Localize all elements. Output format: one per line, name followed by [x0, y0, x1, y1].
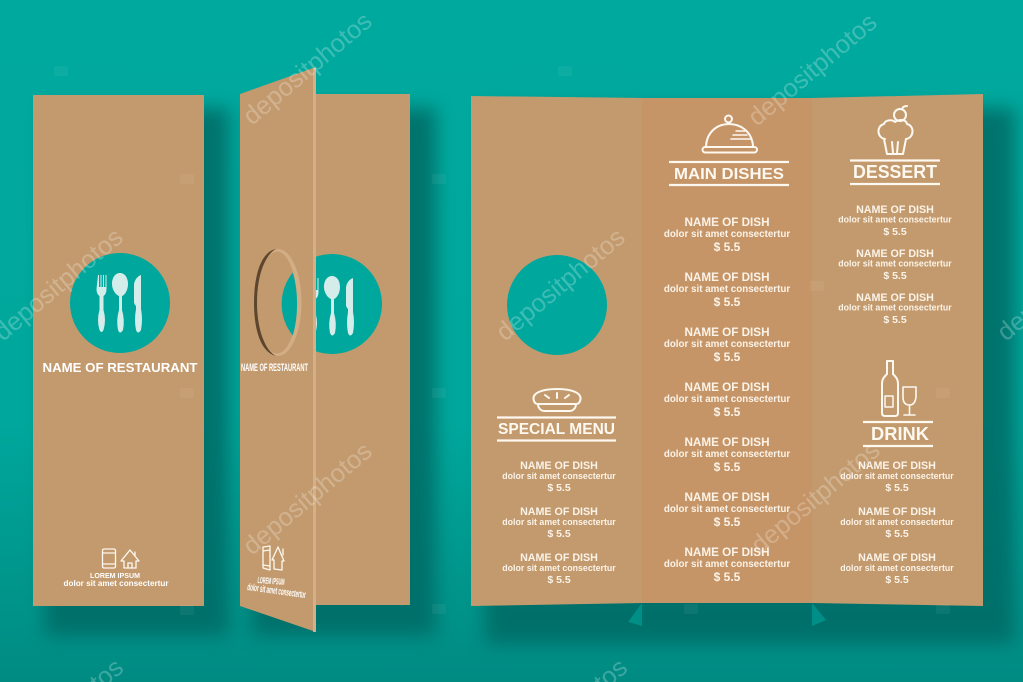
dish: $ 5.5 [714, 515, 741, 529]
watermarks: depositphotos [746, 436, 886, 560]
dish [664, 326, 790, 364]
watermarks: depositphotos [491, 223, 631, 347]
dish: NAME OF DISH [684, 216, 770, 229]
dish: dolor sit amet consectertur [502, 471, 616, 481]
flap fold highlight [313, 68, 316, 632]
dish: NAME OF DISH [520, 460, 598, 472]
teal circle [507, 255, 607, 355]
dish: dolor sit amet consectertur [840, 517, 954, 527]
dish: $ 5.5 [714, 295, 741, 309]
dish: NAME OF DISH [520, 552, 598, 564]
dish: NAME OF DISH [684, 271, 770, 284]
dish: $ 5.5 [714, 570, 741, 584]
middle page [642, 98, 812, 603]
icon: house on flap [272, 547, 284, 570]
dish [664, 216, 790, 254]
dish [840, 460, 954, 494]
watermarks: depositphotos [238, 7, 378, 131]
dish: NAME OF DISH [858, 506, 936, 518]
dish [502, 460, 616, 494]
dish: dolor sit amet consectertur [840, 563, 954, 573]
heading rules [669, 162, 789, 185]
restaurant name: NAME OF RESTAURANT [42, 360, 198, 375]
dish: dolor sit amet consectertur [502, 517, 616, 527]
cover sheet [33, 95, 204, 606]
right page [812, 94, 983, 606]
dish: NAME OF DISH [520, 506, 598, 518]
dish [664, 546, 790, 584]
contact text: LOREM IPSUM [90, 571, 140, 580]
dish: dolor sit amet consectertur [838, 302, 952, 312]
icon: tablet [102, 549, 116, 568]
dish: dolor sit amet consectertur [502, 563, 616, 573]
section: drink [840, 361, 954, 586]
panel: half-open menu: dolor sit amet consectertur [247, 582, 307, 601]
back page [316, 94, 410, 605]
dish: $ 5.5 [883, 270, 907, 282]
dish: dolor sit amet consectertur [838, 258, 952, 268]
dish: dolor sit amet consectertur [664, 504, 790, 515]
dish: dolor sit amet consectertur [664, 339, 790, 350]
dish: $ 5.5 [883, 226, 907, 238]
heading: DRINK [871, 424, 929, 444]
panel: half-open menu [240, 67, 410, 632]
shadows [45, 108, 1015, 644]
dish [840, 506, 954, 540]
heading rules [863, 422, 933, 446]
dish [502, 506, 616, 540]
contact details: dolor sit amet consectertur [64, 579, 168, 588]
dish: $ 5.5 [714, 405, 741, 419]
dish: dolor sit amet consectertur [838, 214, 952, 224]
heading rules [497, 418, 616, 440]
dish [664, 436, 790, 474]
dish: dolor sit amet consectertur [664, 284, 790, 295]
dish: NAME OF DISH [684, 326, 770, 339]
heading: SPECIAL MENU [498, 421, 615, 438]
flap restaurant name: NAME OF RESTAURANT [241, 362, 308, 374]
dish: $ 5.5 [547, 574, 571, 586]
watermark camera icons [54, 66, 950, 615]
dish [664, 271, 790, 309]
dish: dolor sit amet consectertur [664, 229, 790, 240]
icon: cupcake [878, 106, 913, 154]
dish: $ 5.5 [885, 482, 909, 494]
icon: cloche [702, 116, 757, 152]
dish: dolor sit amet consectertur [664, 559, 790, 570]
dish: $ 5.5 [714, 240, 741, 254]
watermarks: depositphotos [238, 437, 378, 561]
dish [664, 491, 790, 529]
icon: pie [534, 389, 580, 411]
dish: dolor sit amet consectertur [840, 471, 954, 481]
left page [471, 96, 642, 606]
section: dessert [838, 106, 952, 326]
dish [664, 381, 790, 419]
heading: MAIN DISHES [674, 166, 784, 183]
icon: house [121, 550, 139, 568]
dish [502, 552, 616, 586]
dish [838, 292, 952, 326]
dish: NAME OF DISH [684, 381, 770, 394]
icon: tablet on flap [263, 546, 270, 570]
dish: $ 5.5 [885, 528, 909, 540]
dish: $ 5.5 [883, 314, 907, 326]
die-cut hole in flap [254, 249, 302, 356]
dish: $ 5.5 [547, 528, 571, 540]
heading: DESSERT [853, 162, 937, 182]
dish: NAME OF DISH [856, 204, 934, 216]
dish [838, 204, 952, 238]
back page circle and cutlery [316, 254, 382, 354]
panel: half-open menu: LOREM IPSUM [257, 575, 285, 587]
dish: NAME OF DISH [858, 460, 936, 472]
watermarks: depositphotos [743, 8, 883, 132]
dish: $ 5.5 [714, 350, 741, 364]
dish: NAME OF DISH [684, 436, 770, 449]
icon: bottle and glass [882, 361, 916, 416]
panel: closed menu cover [33, 95, 204, 606]
front flap [240, 67, 316, 632]
dish: $ 5.5 [885, 574, 909, 586]
panel: open menu [471, 94, 983, 606]
dish [840, 552, 954, 586]
dish: $ 5.5 [714, 460, 741, 474]
dish: $ 5.5 [547, 482, 571, 494]
section: special menu [497, 389, 616, 586]
dish: NAME OF DISH [684, 491, 770, 504]
dish [838, 248, 952, 282]
section: main dishes [664, 116, 790, 584]
heading rules [850, 160, 940, 184]
dish: dolor sit amet consectertur [664, 449, 790, 460]
dish: NAME OF DISH [684, 546, 770, 559]
dish: NAME OF DISH [856, 292, 934, 304]
dish: NAME OF DISH [858, 552, 936, 564]
dish: NAME OF DISH [856, 248, 934, 260]
icon: cutlery [96, 273, 142, 332]
dish: dolor sit amet consectertur [664, 394, 790, 405]
teal circle [70, 253, 170, 353]
